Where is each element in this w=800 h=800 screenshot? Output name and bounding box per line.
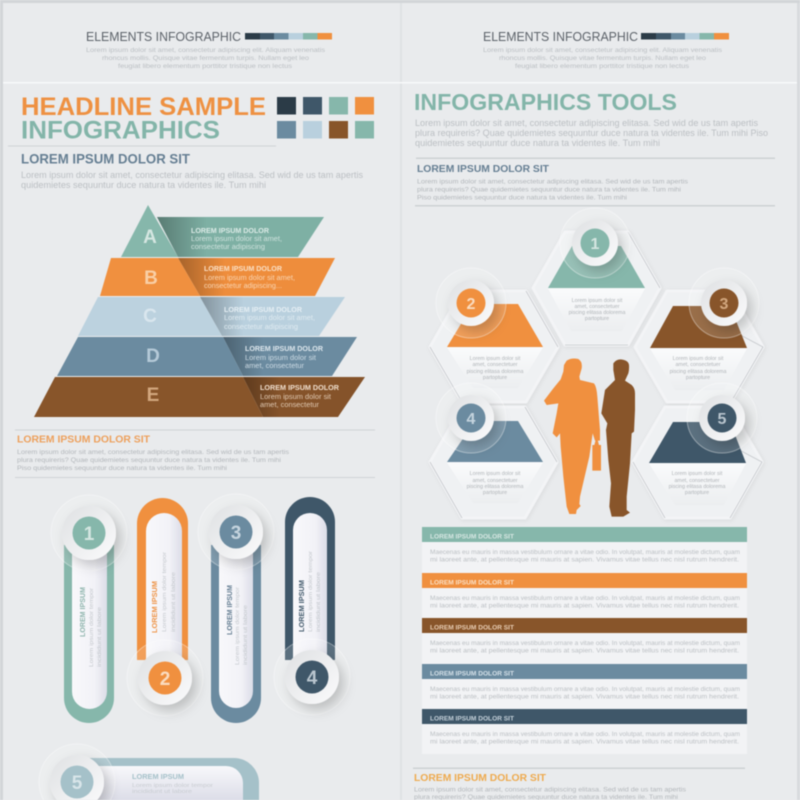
icon: man silhouette (544, 358, 600, 514)
hexagon 4 text: Lorem ipsum dolor sit (470, 471, 521, 477)
left lower text (17, 449, 290, 472)
hexagon 2 text: amet, consectetuer (472, 362, 518, 368)
table row 1: mi laoreet ante, at pellentesque mi mauris at sapien. Vivamus vitae tellus nec nisl rutrum hendrerit. (430, 556, 739, 564)
badge: hexagon 1: 1 (591, 236, 600, 253)
right header description: rhoncus mollis. Quisque vitae fermentum turpis. Nullam eget leo (499, 55, 706, 62)
badge: hexagon 3: 3 (720, 296, 729, 313)
hexagon 3 text: amet, consectetuer (675, 362, 721, 368)
bottom right text (414, 786, 687, 800)
badge 1: 1 (84, 524, 95, 545)
pill 3 (198, 494, 274, 723)
pyramid tier E: amet, consectetur (260, 402, 320, 409)
hexagon 2 (430, 268, 558, 402)
pyramid tier C: LOREM IPSUM DOLOR (224, 307, 302, 314)
left header title: ELEMENTS INFOGRAPHIC (86, 29, 241, 44)
badge 3 (198, 494, 274, 570)
hexagon 4 text: partopture (483, 490, 507, 496)
table row 1 (422, 527, 747, 564)
pill 4 text: Lorem ipsum dolor tempor (308, 551, 314, 632)
pyramid tier D: amet, consectetur (245, 363, 305, 370)
icon: woman silhouette (601, 359, 635, 517)
left header colour bar (245, 33, 332, 40)
pill 2 text (150, 552, 177, 633)
table row 4: LOREM IPSUM DOLOR SIT (430, 670, 514, 678)
table row 3: mi laoreet ante, at pellentesque mi mauris at sapien. Vivamus vitae tellus nec nisl rutrum hendrerit. (430, 648, 739, 654)
hexagon 1 text: Lorem ipsum dolor sit (572, 298, 623, 304)
table row 3 (422, 618, 747, 654)
people silhouettes (544, 358, 635, 517)
left lower text: Lorem ipsum dolor sit amet, consectetur adipiscing elitasa. Sed wid de us tam apertis (17, 449, 290, 456)
hexagon 1 text (569, 298, 625, 322)
right title: INFOGRAPHICS TOOLS (414, 89, 677, 115)
pyramid tier B: consectetur adipiscing... (204, 283, 282, 290)
hexagon 1 text: amet, consectetuer (574, 304, 620, 310)
right intro text: quidemietes sequuntur duce natura ta videntes ile. Tum mihi (415, 138, 660, 148)
pyramid tier E: Lorem ipsum dolor sit (260, 394, 331, 401)
pyramid tier C: consectetur adipiscing (224, 324, 298, 331)
table row 2: Maecenas eu mauris in massa vestibulum ornare a vitae odio. In volutpat, mauris at molestie dictum, quam (430, 595, 740, 602)
right intro text: plura requireris? Quae quidemietes sequuntur duce natura ta videntes ile. Tum mihi Piso (415, 128, 768, 138)
badge 4: 4 (307, 668, 318, 689)
table row 5 (422, 709, 747, 746)
left lower text: Piso quidemietes sequuntur duce natura ta videntes ile. Tum mihi (17, 465, 228, 472)
pill 2 (127, 498, 203, 716)
pyramid tier E: E (147, 385, 159, 406)
left lower subheading: LOREM IPSUM DOLOR SIT (17, 434, 151, 446)
hexagon 5 text: amet, consectetuer (674, 478, 720, 484)
badge 2: 2 (160, 669, 170, 690)
icon: briefcase (592, 440, 601, 471)
pill 2 text: incididunt ut labore (171, 572, 177, 632)
hexagon 3 text: Lorem ipsum dolor sit (673, 356, 724, 362)
hexagon 3 (635, 268, 763, 402)
right subheading text (417, 178, 689, 202)
pill 1 text (78, 587, 103, 667)
pyramid tier A (121, 205, 324, 257)
table row 1: Maecenas eu mauris in massa vestibulum ornare a vitae odio. In volutpat, mauris at molestie dictum, quam (430, 549, 740, 556)
pill 4 (274, 497, 350, 715)
pill 3 text: incididunt ut labore (243, 605, 249, 665)
badge 2 (127, 640, 203, 716)
pyramid tier A: consectetur adipiscing (191, 244, 265, 251)
right header (483, 29, 729, 70)
pill 5 text: Lorem ipsum dolor tempor (132, 783, 213, 789)
badge 3: 3 (231, 523, 241, 544)
pyramid tier B: B (144, 268, 158, 289)
hexagon 1 text: piscing elitasa dolorema (569, 310, 625, 316)
badge: hexagon 5: 5 (718, 411, 727, 428)
pyramid tier D: Lorem ipsum dolor sit (245, 355, 316, 362)
bottom right subheading: LOREM IPSUM DOLOR SIT (414, 772, 547, 784)
right header colour bar (641, 33, 729, 40)
badge 4 (274, 639, 350, 715)
table row 5: mi laoreet ante, at pellentesque mi mauris at sapien. Vivamus vitae tellus nec nisl rutrum hendrerit. (430, 738, 739, 746)
hexagon 2 text: Lorem ipsum dolor sit (470, 356, 521, 362)
left subheading: LOREM IPSUM DOLOR SIT (21, 150, 190, 166)
left intro text (21, 170, 363, 190)
pill 5 text: LOREM IPSUM (132, 772, 184, 781)
hexagon 2 text: partopture (483, 375, 507, 381)
pyramid tier E: LOREM IPSUM DOLOR (260, 385, 339, 392)
left intro text: quidemietes sequuntur duce natura ta videntes ile. Tum mihi (21, 180, 266, 190)
right subheading text: plura requireris? Quae quidemietes sequuntur duce natura ta videntes ile. Tum mihi (417, 186, 682, 194)
pyramid tier D: D (146, 346, 160, 367)
table row 4: mi laoreet ante, at pellentesque mi mauris at sapien. Vivamus vitae tellus nec nisl rutrum hendrerit. (430, 694, 739, 700)
pyramid tier B: Lorem ipsum dolor sit amet, (204, 275, 295, 282)
hexagon 2 text: piscing elitasa dolorema (467, 369, 523, 375)
hexagon 4 (430, 383, 557, 518)
left header (86, 29, 332, 70)
headline: INFOGRAPHICS (21, 116, 220, 144)
right header description: feugiat libero elementum porttitor tristique non lectus (515, 63, 690, 70)
hexagon 5 text: partopture (685, 490, 709, 496)
pyramid tier C: C (143, 306, 157, 327)
table row 3: LOREM IPSUM DOLOR SIT (430, 624, 514, 632)
table row 2 (422, 573, 747, 610)
left header description: rhoncus mollis. Quisque vitae fermentum turpis. Nullam eget leo (102, 55, 309, 62)
table row 2: LOREM IPSUM DOLOR SIT (430, 580, 514, 586)
hexagon 5 text (669, 471, 725, 496)
table row 1: LOREM IPSUM DOLOR SIT (430, 534, 514, 540)
hexagon 1 text: partopture (585, 316, 609, 322)
table panel (422, 527, 747, 754)
pyramid tier C (78, 297, 345, 336)
left header description (86, 47, 326, 70)
right header description (483, 47, 723, 70)
badge: hexagon 4: 4 (467, 411, 476, 428)
right intro text (415, 118, 768, 148)
pill 1 text: LOREM IPSUM (78, 587, 87, 637)
right header title: ELEMENTS INFOGRAPHIC (483, 29, 638, 44)
hexagon 3 text: partopture (686, 375, 710, 381)
pill 5 text (132, 772, 213, 795)
pyramid chart (34, 205, 365, 417)
pill 3 text: Lorem ipsum dolor tempor (235, 587, 241, 665)
pyramid tier E (34, 377, 365, 417)
hexagon 3 text (670, 356, 726, 381)
pill 4 text (297, 551, 322, 632)
headline: HEADLINE SAMPLE (21, 93, 266, 121)
pyramid tier A: LOREM IPSUM DOLOR (191, 228, 269, 235)
table row 4: Maecenas eu mauris in massa vestibulum ornare a vitae odio. In volutpat, mauris at molestie dictum, quam (430, 686, 740, 693)
left lower text: plura requireris? Quae quidemietes sequuntur duce natura ta videntes ile. Tum mihi (17, 457, 282, 464)
pill 2 text: LOREM IPSUM (150, 581, 159, 633)
pill 3 text (225, 585, 249, 665)
pill 4 text: incididunt ut labore (316, 572, 322, 632)
pyramid tier D (57, 337, 357, 376)
colour swatches (277, 97, 374, 138)
hexagon 5 (633, 383, 762, 518)
table row 3: Maecenas eu mauris in massa vestibulum ornare a vitae odio. In volutpat, mauris at molestie dictum, quam (430, 640, 740, 647)
left intro text: Lorem ipsum dolor sit amet, consectetur adipiscing elitasa. Sed wid de us tam apertis (21, 170, 363, 180)
hexagon 4 text (467, 471, 523, 496)
hexagon 2 text (467, 356, 523, 381)
pill 5 text: incididunt ut labore (132, 789, 192, 795)
badge 1 (51, 495, 127, 571)
pyramid tier D: LOREM IPSUM DOLOR (245, 346, 323, 353)
hexagon 4 text: amet, consectetuer (472, 478, 518, 484)
headline (21, 93, 266, 144)
hexagon 3 text: piscing elitasa dolorema (670, 369, 726, 375)
table row 5: Maecenas eu mauris in massa vestibulum ornare a vitae odio. In volutpat, mauris at molestie dictum, quam (430, 731, 740, 738)
badge 5 (39, 744, 115, 800)
right subheading text: Piso quidemietes sequuntur duce natura ta videntes ile. Tum mihi (417, 194, 628, 202)
bottom right text: Lorem ipsum dolor sit amet, consectetur adipiscing elitasa. Sed wid de us tam apertis (414, 786, 687, 794)
pyramid tier B: LOREM IPSUM DOLOR (204, 266, 282, 273)
right subheading: LOREM IPSUM DOLOR SIT (417, 163, 550, 175)
pill 1 (51, 495, 127, 723)
badge 5: 5 (72, 773, 83, 794)
pill 2 text: Lorem ipsum dolor tempor (162, 552, 168, 632)
right subheading text: Lorem ipsum dolor sit amet, consectetur adipiscing elitasa. Sed wid de us tam apertis (417, 178, 689, 186)
pill 3 text: LOREM IPSUM (225, 585, 234, 635)
left header description: feugiat libero elementum porttitor tristique non lectus (118, 63, 293, 70)
badge: hexagon 2: 2 (467, 296, 476, 313)
hexagon 5 text: Lorem ipsum dolor sit (672, 471, 723, 477)
pill 1 text: incididunt ut labore (97, 607, 103, 667)
pyramid tier A: Lorem ipsum dolor sit amet, (191, 236, 282, 243)
right header description: Lorem ipsum dolor sit amet, consectetur adipiscing elit. Aliquam venenatis (483, 47, 723, 54)
pyramid tier C: Lorem ipsum dolor sit amet, (224, 315, 315, 322)
pill 5 (39, 744, 259, 800)
table row 4 (422, 664, 747, 700)
hexagon 4 text: piscing elitasa dolorema (467, 484, 523, 490)
left header description: Lorem ipsum dolor sit amet, consectetur adipiscing elit. Aliquam venenatis (86, 47, 326, 54)
table row 5: LOREM IPSUM DOLOR SIT (430, 716, 514, 722)
table row 2: mi laoreet ante, at pellentesque mi mauris at sapien. Vivamus vitae tellus nec nisl rutrum hendrerit. (430, 602, 739, 610)
pill 4 text: LOREM IPSUM (297, 580, 306, 632)
pyramid tier A: A (143, 227, 157, 248)
hexagon 1 (533, 208, 660, 345)
pyramid tier B (100, 258, 335, 296)
pill 1 text: Lorem ipsum dolor tempor (89, 588, 95, 667)
hexagon 5 text: piscing elitasa dolorema (669, 484, 725, 490)
right intro text: Lorem ipsum dolor sit amet, consectetur adipiscing elitasa. Sed wid de us tam apertis (415, 118, 758, 128)
